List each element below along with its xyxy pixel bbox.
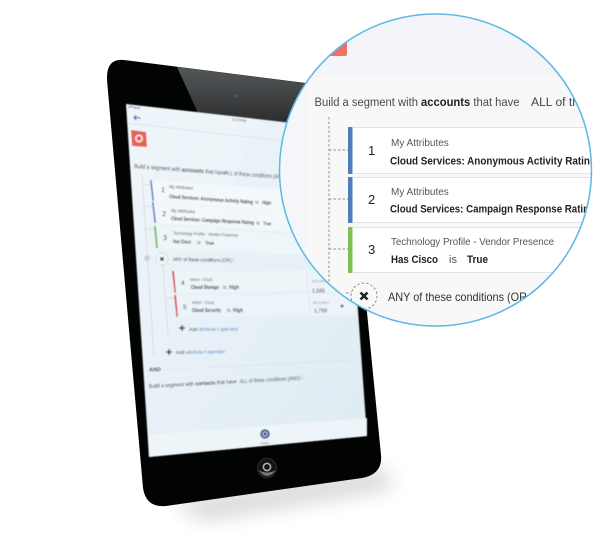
condition 2: 2 (162, 211, 166, 218)
camera (234, 94, 238, 98)
contacts heading: Build a segment with contacts that have (149, 379, 237, 390)
OR icon (351, 283, 377, 309)
divider (162, 360, 353, 370)
condition 3: Has Cisco (173, 239, 192, 246)
header divider (127, 123, 346, 148)
tablet shadow (170, 468, 394, 520)
condition 5: Cloud Security (192, 308, 221, 314)
collapse handle (144, 256, 150, 260)
row 1 (348, 127, 598, 174)
status time: 2:10 PM (232, 118, 246, 123)
home button (258, 458, 276, 478)
contacts heading (149, 376, 303, 390)
condition 3: Technology Profile - Vendor Presence (173, 231, 239, 238)
OR label: ANY of these conditions (OR (388, 290, 527, 304)
condition 3: True (205, 241, 214, 247)
condition 1: Cloud Services: Anonymous Activity Rating (169, 194, 253, 206)
bezel glare (177, 67, 305, 123)
row 3: is (449, 254, 457, 266)
tablet body (107, 60, 381, 506)
segment heading: Build a segment with accounts that have (134, 164, 227, 177)
heading: ALL of th (531, 97, 579, 109)
row 3: True (467, 254, 488, 266)
segment heading (134, 164, 281, 181)
condition 5: is (227, 308, 231, 314)
condition 2: My Attributes (171, 208, 196, 214)
row 3: Has Cisco (391, 254, 438, 266)
condition 2: is (256, 221, 260, 227)
update icon: Update (260, 441, 269, 445)
AND label: AND (149, 367, 161, 373)
condition 1: High (262, 200, 271, 207)
condition 2: Cloud Services: Campaign Response Rating (171, 216, 254, 226)
condition 3: 3 (163, 235, 167, 242)
row 2: 2 (368, 192, 375, 207)
row 2 (348, 177, 598, 223)
add attribute inner (179, 325, 239, 333)
top band (279, 14, 592, 77)
row 1: Cloud Services: Anonymous Activity Rating (390, 156, 596, 168)
condition 4: is (223, 285, 227, 291)
condition 4: RECORDS (312, 280, 328, 284)
condition 1: is (255, 200, 259, 206)
condition 4: Cloud Storage (191, 285, 219, 291)
row 1: 1 (368, 143, 375, 158)
condition 4: Intent - Cloud (190, 277, 212, 282)
row 3 (348, 227, 598, 273)
row 3: Technology Profile - Vendor Presence (391, 237, 554, 248)
add attribute outer: Add attribute / operator (176, 349, 226, 356)
condition 4: High (229, 285, 239, 291)
update icon (260, 429, 270, 445)
row 1: My Attributes (391, 138, 449, 149)
tablet device (107, 60, 381, 506)
condition 5: 5 (183, 304, 187, 311)
tablet screen (126, 104, 367, 457)
footer band (148, 418, 367, 457)
row 3: 3 (368, 242, 375, 257)
condition 1 (150, 180, 346, 216)
OR group icon (156, 253, 168, 265)
heading: Build a segment with accounts that have (314, 97, 520, 109)
connector lines (329, 117, 352, 293)
condition 5 (174, 293, 355, 317)
add attribute inner: Add attribute / operator (189, 327, 239, 333)
condition 1: My Attributes (169, 184, 194, 191)
condition 4: 1,585 (312, 288, 325, 294)
connector lines (142, 175, 174, 357)
status bar: iPad (128, 105, 140, 110)
condition 5: Intent - Cloud (192, 300, 214, 305)
condition 4: 4 (181, 280, 185, 287)
red badge crop (330, 42, 347, 56)
magnifier content (315, 42, 591, 309)
condition 5: 1,799 (314, 308, 327, 314)
condition 2 (152, 202, 348, 236)
condition 3 (154, 226, 349, 256)
magnifier ring (280, 14, 592, 326)
OR group label: ANY of these conditions (OR) ⁝ (173, 257, 234, 264)
back arrow (134, 116, 140, 120)
screen background (126, 104, 367, 457)
magnifier circle (279, 14, 598, 327)
contacts heading: ALL of these conditions (AND) ⁝ (240, 376, 303, 385)
row 2: My Attributes (391, 187, 449, 198)
condition 2: True (263, 221, 271, 227)
condition 3: is (197, 240, 201, 246)
magnifier background (280, 14, 592, 326)
condition 5: High (233, 308, 243, 314)
segment heading: ALL of these conditions (AN (225, 171, 281, 181)
condition 5: RECORDS (313, 301, 329, 305)
red badge (131, 130, 147, 147)
add attribute outer (166, 349, 226, 356)
condition 4 (172, 270, 353, 294)
condition 1: 1 (161, 187, 165, 194)
